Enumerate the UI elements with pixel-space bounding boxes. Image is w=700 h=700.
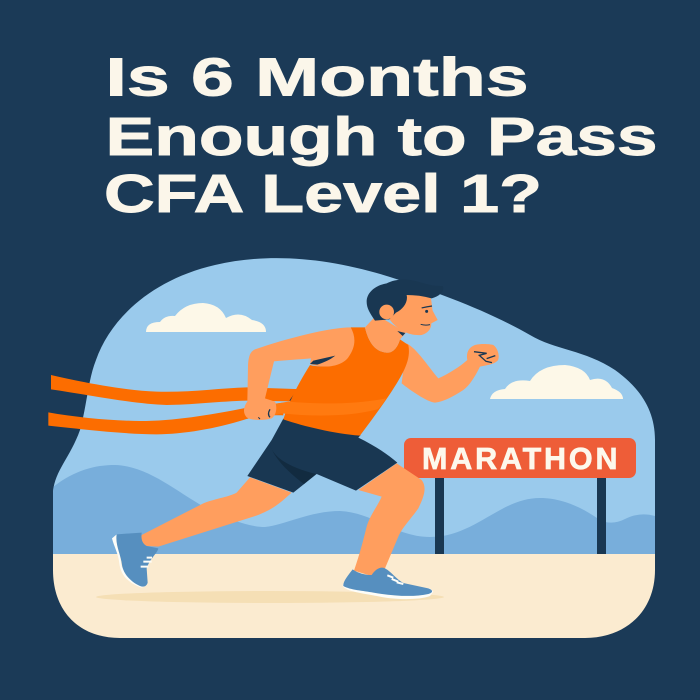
panel: scene backdrop xyxy=(53,258,655,638)
back shoe xyxy=(112,533,158,588)
neck xyxy=(365,315,406,353)
title: Enough to Pass xyxy=(106,107,658,167)
ground xyxy=(53,554,655,638)
ribbon: lower strand xyxy=(48,403,283,434)
shirt xyxy=(283,327,409,436)
head xyxy=(365,279,443,353)
cloud right xyxy=(490,365,623,399)
sign posts xyxy=(435,478,606,554)
face xyxy=(387,293,438,335)
mouth xyxy=(421,323,430,327)
cloud left xyxy=(146,303,266,332)
shorts xyxy=(247,419,397,493)
ear xyxy=(379,305,394,319)
ribbon: upper strand xyxy=(51,375,307,405)
back leg xyxy=(141,477,292,547)
sign: MARATHON: MARATHON xyxy=(422,442,618,476)
title xyxy=(104,48,658,224)
ground shadow xyxy=(96,591,444,603)
runner xyxy=(48,279,499,599)
front arm xyxy=(244,327,354,420)
hair xyxy=(367,279,443,321)
ribbon band across shirt xyxy=(273,398,386,415)
front shoe xyxy=(343,568,433,599)
title: Is 6 Months xyxy=(106,48,528,108)
hills xyxy=(53,465,655,560)
eye and brow xyxy=(422,306,432,308)
front leg xyxy=(354,463,425,576)
forward arm xyxy=(402,343,499,403)
sky xyxy=(53,258,655,537)
title: CFA Level 1? xyxy=(104,164,542,224)
